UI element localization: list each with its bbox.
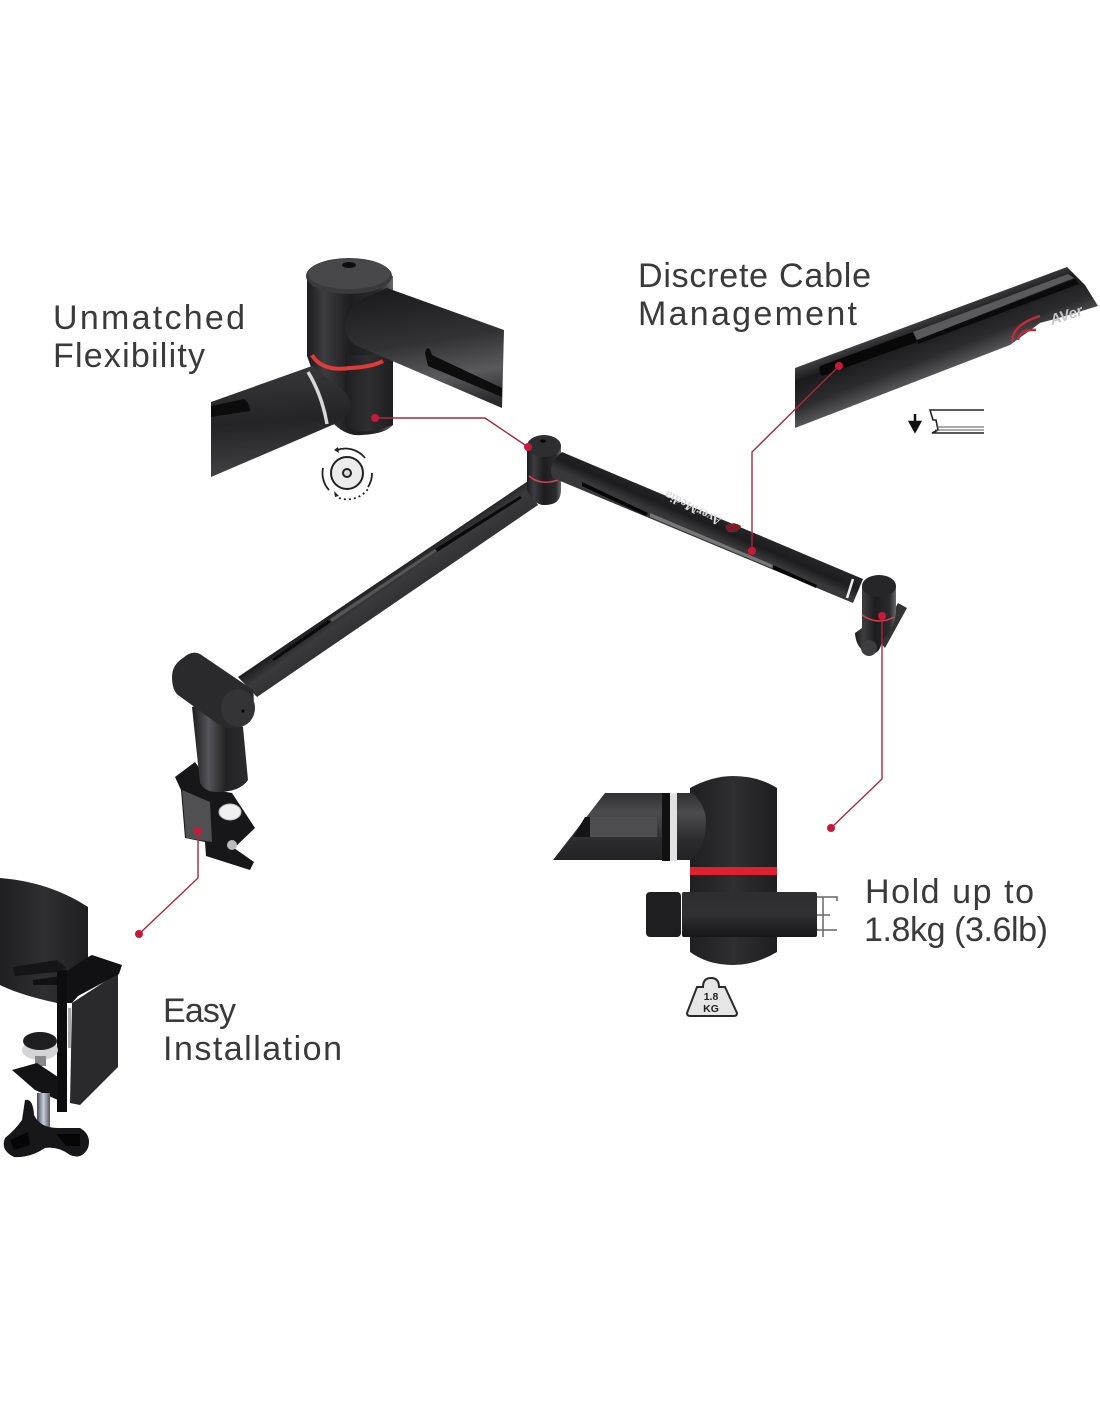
lower jaw [12,1063,58,1100]
channel tube [795,267,1098,428]
connector pins [817,897,837,937]
label: Easy Installation [163,992,342,1068]
center joint [527,446,561,505]
label: Unmatched Flexibility: Flexibility [53,337,205,375]
clamp rod [57,970,67,1112]
base post [192,700,248,792]
label: Hold up to 1.8kg (3.6lb): 1.8kg (3.6lb) [864,911,1048,949]
knurled knob [646,892,681,937]
upper right arm [345,288,504,408]
angled arm [553,793,706,860]
icon: weight 1.8 KG: 1.8 [704,991,718,1003]
logo swirl [1012,316,1040,342]
red band [690,867,777,875]
clamp box face [70,973,118,1105]
channel ridge [913,274,1074,340]
main arm [172,435,907,870]
icon: weight 1.8 KG: KG [703,1003,719,1015]
label: Easy Installation: Easy [163,992,236,1030]
detail image: cable channel close-up [795,267,1098,428]
base clamp body behind post [175,762,255,870]
label: Unmatched Flexibility: Unmatched [53,299,245,337]
callout line: installation [135,827,202,938]
detail image: clamp close-up [0,878,122,1157]
lower left arm [211,366,350,477]
label: Hold up to 1.8kg (3.6lb): Hold up to [865,873,1034,911]
washer [22,1040,58,1060]
icon: weight 1.8 KG [687,978,737,1016]
brand fragment: AVer [1047,302,1086,329]
joint top cap [306,258,392,294]
label: Unmatched Flexibility [53,299,245,375]
end joint [878,603,907,648]
detail image: microphone joint [553,776,837,965]
threaded bolt [37,1093,50,1129]
joint body [690,776,777,965]
three-lobed knob [4,1100,89,1157]
brand lettering: AverMedia [661,488,724,529]
barrel [682,892,817,937]
desk clamp [182,790,212,842]
callout line: flexibility [371,414,532,451]
curved back plate [0,878,88,1003]
callout line: weight capacity [827,612,886,832]
callout line: cable management [748,362,843,555]
icon: rotation [322,447,372,499]
label: Hold up to 1.8kg (3.6lb) [864,873,1048,949]
label: Discrete Cable Management: Management [638,295,858,333]
label: Easy Installation: Installation [163,1030,342,1068]
cable slot [819,332,917,376]
icon: cable channel [910,410,984,433]
red ring [312,355,383,369]
label: Discrete Cable Management [638,257,871,333]
clamp top plate [33,955,122,1003]
upper arm segment [551,452,863,603]
detail image: flexible joint close-up [211,258,504,477]
label: Discrete Cable Management: Discrete Cable [638,257,871,295]
base elbow [172,653,254,728]
lower arm segment [238,481,538,697]
joint cylinder [307,276,393,435]
